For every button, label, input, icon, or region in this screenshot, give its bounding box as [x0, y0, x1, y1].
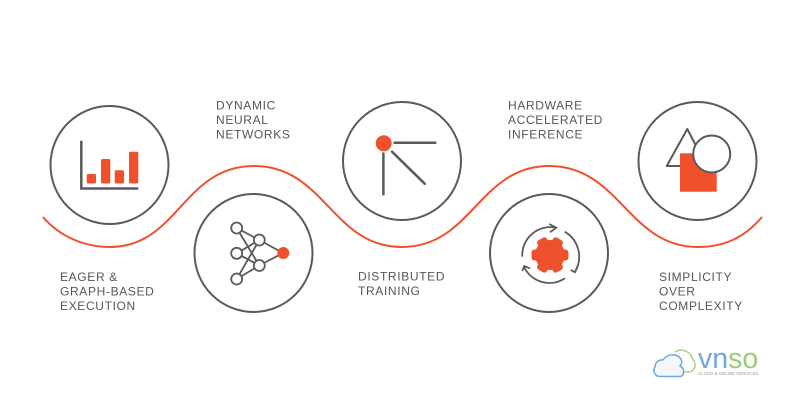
- circle 4: gear: [490, 194, 608, 312]
- icon: red node: [376, 135, 392, 151]
- label: simplicity over complexity: [659, 270, 743, 313]
- icon: blue cloud: [654, 355, 684, 377]
- logo tagline: CLOUD & ONLINE SERVICES: [698, 371, 759, 376]
- label: simplicity over complexity: SIMPLICITY: [659, 270, 732, 284]
- icon: circular arrows: [522, 224, 579, 283]
- wave line: [43, 166, 762, 247]
- icon: triangle: [667, 129, 706, 166]
- label: distributed training: [358, 270, 445, 298]
- circle 5: shapes: [638, 102, 756, 220]
- label: simplicity over complexity: COMPLEXITY: [659, 299, 743, 313]
- icon: red square: [680, 153, 717, 192]
- label: dynamic neural networks: NETWORKS: [216, 128, 291, 142]
- label: eager and graph-based execution: EXECUTION: [60, 299, 136, 313]
- circle 1: bar chart: [50, 106, 168, 224]
- label: hardware accelerated inference: ACCELERATED: [508, 113, 603, 127]
- label: hardware accelerated inference: HARDWARE: [508, 98, 583, 112]
- label: hardware accelerated inference: INFERENCE: [508, 128, 583, 142]
- icon: green cloud: [675, 350, 695, 372]
- icon: gear: [532, 236, 568, 274]
- circle 3: distributed: [343, 102, 461, 220]
- icon: three lines: [383, 143, 435, 194]
- label: distributed training: DISTRIBUTED: [358, 270, 445, 284]
- label: eager and graph-based execution: EAGER &: [60, 270, 118, 284]
- icon: network links: [237, 228, 283, 279]
- icon: bars: [87, 152, 138, 184]
- label: distributed training: TRAINING: [358, 284, 421, 298]
- label: dynamic neural networks: DYNAMIC: [216, 98, 276, 112]
- label: hardware accelerated inference: [508, 98, 603, 142]
- logo wordmark: vnso: [698, 343, 758, 375]
- label: eager and graph-based execution: GRAPH-BASED: [60, 284, 155, 298]
- icon: output node: [277, 247, 289, 259]
- icon: circle: [693, 136, 730, 172]
- label: dynamic neural networks: [216, 98, 291, 142]
- label: simplicity over complexity: OVER: [659, 284, 696, 298]
- label: eager and graph-based execution: [60, 270, 155, 313]
- icon: network nodes: [231, 222, 265, 284]
- icon: chart axes: [81, 141, 138, 188]
- circle 2: neural network: [194, 194, 312, 312]
- label: dynamic neural networks: NEURAL: [216, 113, 269, 127]
- logo: vnso: [654, 343, 759, 377]
